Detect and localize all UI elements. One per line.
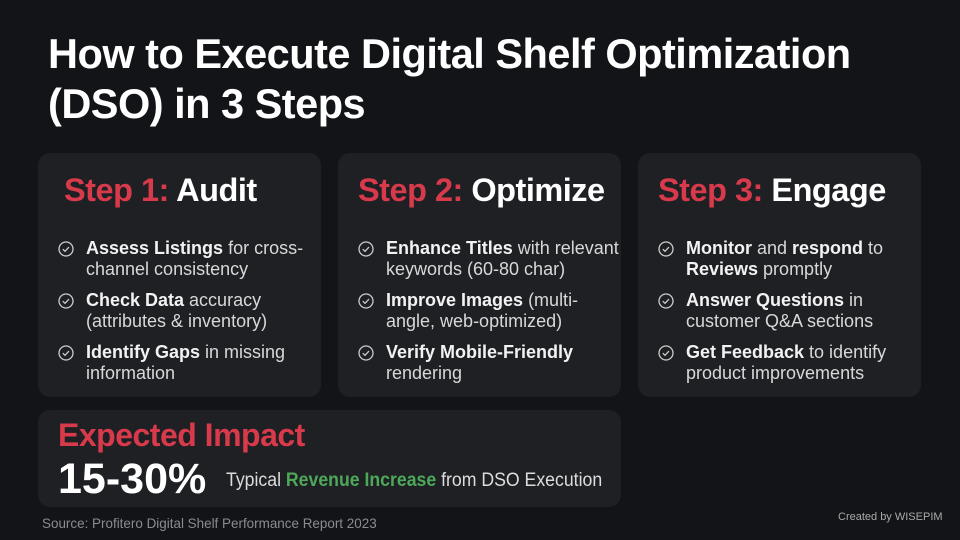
panel: step 3 bbox=[638, 153, 921, 397]
credit: Created by WISEPIM bbox=[838, 511, 943, 523]
impact stat: 15-30% bbox=[58, 455, 206, 503]
item: enhance titles: Enhance Titles with relevant keywords (60-80 char) bbox=[386, 238, 619, 279]
title: How to Execute Digital Shelf Optimization bbox=[48, 30, 851, 77]
item: questions: Answer Questions in customer Q&A sections bbox=[686, 290, 873, 331]
item: feedback: Get Feedback to identify product improvements bbox=[686, 342, 886, 383]
panel: expected impact bbox=[38, 410, 621, 507]
impact description: Typical Revenue Increase from DSO Execution bbox=[226, 470, 602, 491]
item: improve images: Improve Images (multi-angle, web-optimized) bbox=[386, 290, 578, 331]
source note: Source: Profitero Digital Shelf Performance Report 2023 bbox=[42, 515, 377, 531]
item: check data: Check Data accuracy (attributes & inventory) bbox=[86, 290, 267, 331]
item: mobile friendly: Verify Mobile-Friendly rendering bbox=[386, 342, 573, 383]
item: assess listings: Assess Listings for cross-channel consistency bbox=[86, 238, 303, 279]
item: identify gaps: Identify Gaps in missing information bbox=[86, 342, 285, 383]
panel: step 1 bbox=[38, 153, 321, 397]
title bbox=[48, 30, 851, 127]
panel: step 2 bbox=[338, 153, 621, 397]
heading: step 3: Step 3: Engage bbox=[658, 172, 886, 208]
impact heading: Expected Impact bbox=[58, 417, 305, 453]
title: (DSO) in 3 Steps bbox=[48, 80, 365, 127]
heading: step 1: Step 1: Audit bbox=[64, 172, 257, 208]
item: reviews: Monitor and respond to Reviews promptly bbox=[686, 238, 883, 279]
heading: step 2: Step 2: Optimize bbox=[358, 172, 605, 208]
